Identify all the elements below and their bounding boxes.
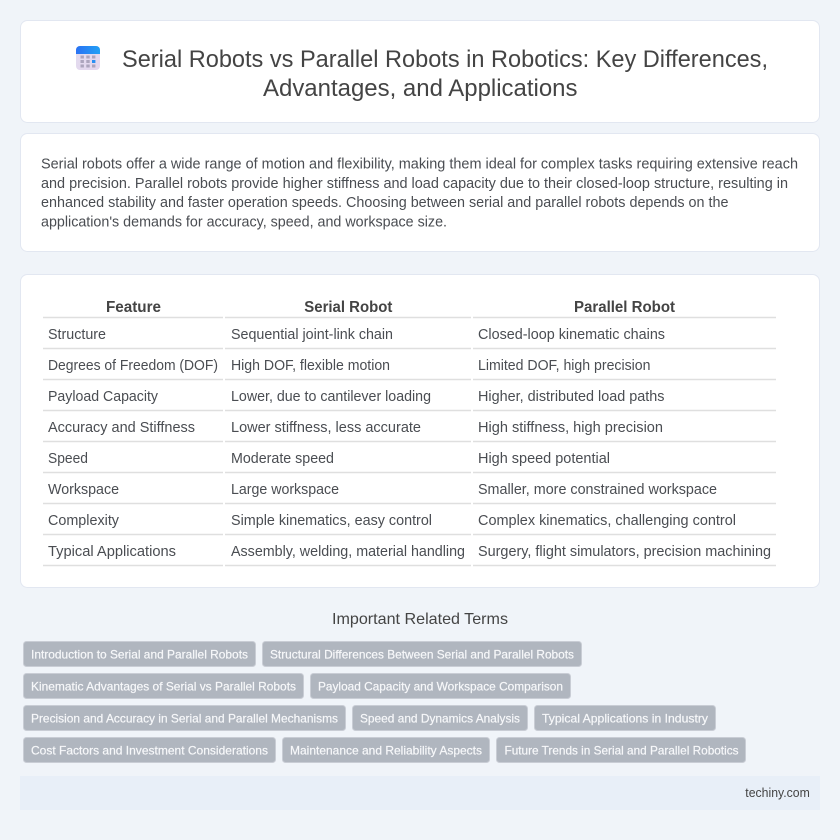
table row: Typical Applications <box>43 544 776 566</box>
table row: Degrees of Freedom: Degrees of Freedom (DOF) <box>48 358 218 374</box>
chip: Introduction to Serial and Parallel Robots <box>31 647 248 661</box>
table row: Degrees of Freedom <box>43 358 776 380</box>
chip: Structural Differences Between Serial and Parallel Robots <box>270 647 574 661</box>
chip: Speed and Dynamics Analysis <box>360 711 520 725</box>
table row: Structure: Sequential joint-link chain <box>231 327 393 343</box>
table row: Workspace <box>43 482 776 504</box>
chip <box>24 674 304 698</box>
title: Advantages, and Applications <box>263 75 578 102</box>
text block: intro: and precision. Parallel robots provide higher stiffness and load capacity due to their closed-loop structure, resulting in <box>41 176 788 192</box>
table row: Accuracy and Stiffness <box>43 420 776 442</box>
panel: intro paragraph <box>20 134 820 252</box>
chip <box>352 706 528 730</box>
icon: calendar <box>76 46 100 70</box>
footer: techiny.com <box>745 786 810 800</box>
chip: Precision and Accuracy in Serial and Parallel Mechanisms <box>31 711 338 725</box>
chip: Typical Applications in Industry <box>542 711 708 725</box>
table row: Typical Applications: Typical Applications <box>48 544 176 560</box>
table header row <box>43 299 776 318</box>
table row: Typical Applications: Surgery, flight simulators, precision machining <box>478 544 771 560</box>
table row: Accuracy and Stiffness: Accuracy and Stiffness <box>48 420 195 436</box>
table row: Degrees of Freedom: Limited DOF, high precision <box>478 358 650 374</box>
table row: Complexity <box>43 513 776 534</box>
table row: Structure <box>43 327 776 348</box>
chip <box>496 738 746 762</box>
title <box>122 46 768 102</box>
table row: Payload Capacity: Higher, distributed load paths <box>478 389 664 405</box>
table row: Complexity: Complexity <box>48 513 120 529</box>
chip <box>24 706 346 730</box>
text block: intro: enhanced stability and faster operation speeds. Choosing between serial and parallel robots depends on the <box>41 195 728 211</box>
table row: Accuracy and Stiffness: Lower stiffness, less accurate <box>231 420 421 436</box>
table row: Complexity: Complex kinematics, challenging control <box>478 513 736 529</box>
table header row: Parallel Robot <box>574 299 676 316</box>
table row: Speed <box>43 451 776 472</box>
table row: Accuracy and Stiffness: High stiffness, high precision <box>478 420 663 436</box>
chip: Payload Capacity and Workspace Comparison <box>318 679 563 693</box>
table row: Degrees of Freedom: High DOF, flexible motion <box>231 358 390 374</box>
footer <box>20 776 820 810</box>
table row: Payload Capacity: Payload Capacity <box>48 389 159 405</box>
text block: intro: Serial robots offer a wide range of motion and flexibility, making them ideal for complex tasks requiring extensive reach <box>41 156 798 172</box>
table row: Typical Applications: Assembly, welding, material handling <box>231 544 465 560</box>
text block: intro: application's demands for accuracy, speed, and workspace size. <box>41 214 447 230</box>
chip <box>534 706 716 730</box>
chip: Future Trends in Serial and Parallel Robotics <box>504 743 738 757</box>
table row: Speed: Speed <box>48 451 88 467</box>
table row: Structure: Closed-loop kinematic chains <box>478 327 665 343</box>
chip <box>262 642 582 666</box>
heading: related terms: Important Related Terms <box>332 611 508 628</box>
title: Serial Robots vs Parallel Robots in Robotics: Key Differences, <box>122 46 768 73</box>
table row: Payload Capacity: Lower, due to cantilever loading <box>231 389 431 405</box>
table row: Speed: High speed potential <box>478 451 610 467</box>
panel: comparison table <box>20 274 820 588</box>
table row: Payload Capacity <box>43 389 776 410</box>
chip <box>24 738 276 762</box>
table row: Complexity: Simple kinematics, easy control <box>231 513 432 529</box>
table row: Workspace: Workspace <box>48 482 119 498</box>
panel: title header <box>20 20 820 122</box>
chip <box>24 642 256 666</box>
table row: Structure: Structure <box>48 327 106 343</box>
text block: intro <box>41 156 798 230</box>
panel: related term chips <box>24 642 746 762</box>
chip: Cost Factors and Investment Considerations <box>31 743 268 757</box>
chip <box>310 674 570 698</box>
chip: Maintenance and Reliability Aspects <box>290 743 482 757</box>
table row: Speed: Moderate speed <box>231 451 334 467</box>
chip: Kinematic Advantages of Serial vs Parallel Robots <box>31 679 296 693</box>
table row: Workspace: Large workspace <box>231 482 339 498</box>
table header row: Feature <box>106 299 161 316</box>
table header row: Serial Robot <box>304 299 393 316</box>
chip <box>282 738 490 762</box>
table row: Workspace: Smaller, more constrained workspace <box>478 482 717 498</box>
